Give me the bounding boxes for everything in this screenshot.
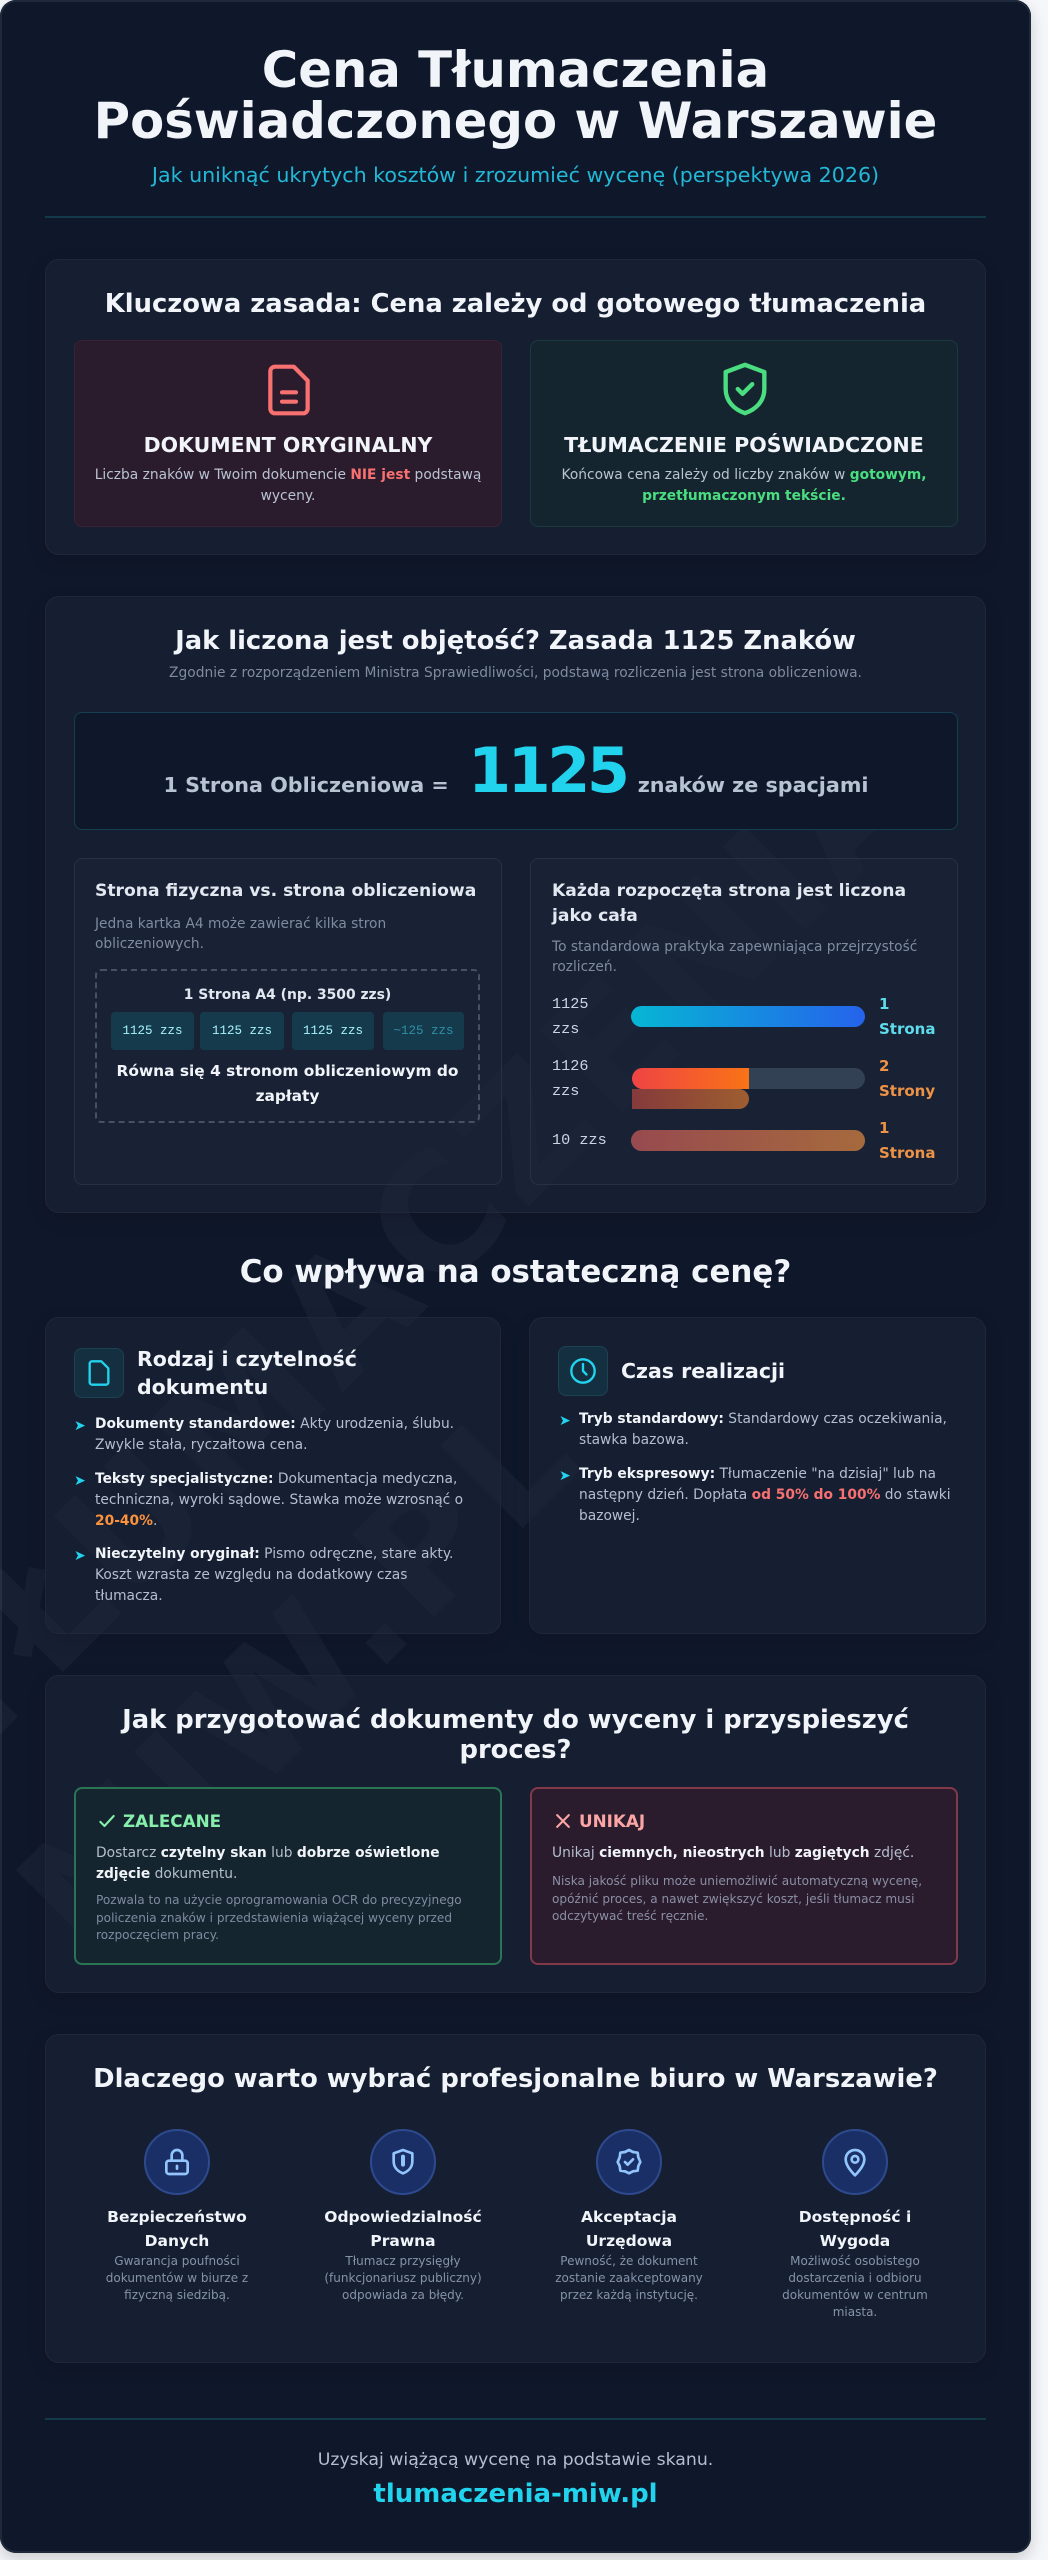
icon: map pin [822,2129,888,2195]
bullet list [74,1416,463,1604]
bar chart [552,995,935,1162]
chip: 1125 zzs [303,1024,363,1038]
result text: Równa się 4 stronom obliczeniowym do [117,1062,458,1080]
feature: data security [106,2208,248,2302]
diagram label: 1 Strona A4 (np. 3500 zzs) [184,987,391,1003]
bullet text: 20-40%. [95,1513,157,1529]
feature: official acceptance: Pewność, że dokument [560,2254,698,2268]
card text: Unikaj ciemnych, nieostrych lub zagiętych zdjęć. [552,1845,914,1861]
card title: DOKUMENT ORYGINALNY [144,433,432,457]
value label: Strona [879,1020,935,1038]
card note: rozpoczęciem pracy. [96,1928,219,1942]
row label: zzs [552,1020,579,1038]
bullet text: techniczna, wyroki sądowe. Stawka może wzrosnąć o [95,1492,463,1508]
page split diagram [95,969,480,1123]
bar: 1126 [632,1068,865,1089]
icon: badge check [596,2129,662,2195]
feature: data security: dokumentów w biurze z [106,2271,248,2285]
footer link: tlumaczenia-miw.pl [373,2479,658,2509]
card note: Pozwala to na użycie oprogramowania OCR do precyzyjnego [96,1893,462,1907]
feature: availability: dokumentów w centrum [782,2288,928,2302]
result text: zapłaty [256,1087,319,1105]
bullet text: Dokumenty standardowe: Akty urodzenia, ślubu. [95,1416,454,1432]
icon: file [74,1348,124,1398]
bullet text [95,1416,454,1453]
card text [96,1845,440,1882]
chip [111,1012,194,1050]
bullet text: następny dzień. Dopłata od 50% do 100% do stawki [579,1487,951,1503]
card description: rozliczeń. [552,959,617,975]
value label: Strony [879,1082,935,1100]
feature: official acceptance: zostanie zaakceptowany [555,2271,703,2285]
chip: 1125 zzs [212,1024,272,1038]
feature: availability: miasta. [833,2305,877,2319]
row label: zzs [552,1082,579,1100]
bullet text [95,1546,453,1604]
formula box: 1 Strona Obliczeniowa = 1125 znaków ze spacjami [164,734,868,807]
bullet text: Tryb standardowy: Standardowy czas oczekiwania, [579,1411,947,1427]
bullet text: Koszt wzrasta ze względu na dodatkowy czas [95,1567,407,1583]
row label: 1126 [552,1057,588,1075]
value label: Strona [879,1144,935,1162]
card text: wyceny. [261,488,315,504]
panel: key rule [45,259,986,555]
feature: official acceptance: przez każdą instytucję. [560,2288,698,2302]
feature: official acceptance: Akceptacja [581,2208,677,2226]
formula box [74,712,958,830]
bullet: ➤ [74,1418,86,1434]
panel title: dokumentu [137,1375,268,1399]
card note: opóźnić proces, a nawet zwiększyć koszt, jeśli tłumacz musi [552,1892,914,1906]
bullet text [579,1411,947,1448]
value label [879,1119,935,1162]
bar: 10 [631,1130,865,1151]
card description: Jedna kartka A4 może zawierać kilka stron [95,916,386,932]
card note: policzenia znaków i przedstawienia wiążącej wyceny przed [96,1910,452,1924]
card text: zdjęcie dokumentu. [96,1866,237,1882]
bullet: ➤ [74,1548,86,1564]
chip [200,1012,284,1050]
panel: volume calculation [45,596,986,1213]
bullet: ➤ [559,1468,571,1484]
row label [552,1057,588,1100]
value label [879,1057,935,1100]
bullet text: Zwykle stała, ryczałtowa cena. [95,1437,307,1453]
bullet text [579,1466,951,1524]
chip [383,1012,464,1050]
card note [96,1893,462,1942]
value label [879,995,935,1038]
subtitle: Jak uniknąć ukrytych kosztów i zrozumieć wycenę (perspektywa 2026) [152,163,879,187]
card text: Dostarcz czytelny skan lub dobrze oświetlone [96,1845,440,1861]
panel title [137,1347,357,1399]
card: every started page [530,858,958,1185]
bar: 1125 [631,1006,865,1027]
icon: clock [558,1346,608,1396]
card text [95,467,481,504]
feature: availability: Dostępność i [799,2208,911,2226]
card: avoid [530,1787,958,1965]
feature: availability: dostarczenia i odbioru [788,2271,922,2285]
feature: availability: Możliwość osobistego [790,2254,920,2268]
card description [552,939,917,975]
card title: TŁUMACZENIE POŚWIADCZONE [564,433,924,457]
bullet list [559,1411,951,1524]
row label [552,995,588,1038]
feature: legal liability [324,2208,482,2302]
card title: ZALECANE [123,1811,221,1831]
chip: 1125 zzs [122,1024,182,1038]
subheading: Zgodnie z rozporządzeniem Ministra Sprawiedliwości, podstawą rozliczenia jest strona obliczeniowa. [169,665,862,681]
bullet text: bazowej. [579,1508,640,1524]
panel title: Czas realizacji [621,1359,785,1383]
feature: legal liability: Prawna [370,2232,436,2250]
card note [552,1874,922,1923]
chip: ~125 zzs [393,1024,454,1038]
title [94,41,937,150]
card description: To standardowa praktyka zapewniająca przejrzystość [552,939,917,955]
heading: proces? [459,1735,572,1765]
card heading: Strona fizyczna vs. strona obliczeniowa [95,881,476,901]
card description: obliczeniowych. [95,936,204,952]
card heading: jako cała [552,906,638,926]
card: certified translation [530,340,958,527]
panel: preparing documents [45,1675,986,1993]
card note: odczytywać treść ręcznie. [552,1909,708,1923]
card text [561,467,927,504]
feature: official acceptance [555,2208,703,2302]
row label: 1125 [552,995,588,1013]
bullet text: tłumacza. [95,1588,163,1604]
feature: availability: Wygoda [820,2232,890,2250]
feature: official acceptance: Urzędowa [586,2232,672,2250]
footer text: Uzyskaj wiążącą wycenę na podstawie skanu. [318,2450,713,2470]
watermark: MIW.PL [0,1355,617,1990]
card: recommended [74,1787,502,1965]
icon: check [99,1814,115,1828]
card: original document [74,340,502,527]
feature: data security: Bezpieczeństwo [107,2208,247,2226]
bullet text: Tryb ekspresowy: Tłumaczenie "na dzisiaj" lub na [579,1466,936,1482]
heading: Dlaczego warto wybrać profesjonalne biuro w Warszawie? [93,2064,938,2094]
result text [117,1062,458,1105]
heading [120,1705,909,1765]
heading: Kluczowa zasada: Cena zależy od gotowego tłumaczenia [105,289,926,319]
icon: cross [556,1814,570,1828]
card text: Liczba znaków w Twoim dokumencie NIE jest podstawą [95,467,481,483]
feature: data security: fizyczną siedzibą. [124,2288,230,2302]
feature: data security: Gwarancja poufności [114,2254,240,2268]
card note: Niska jakość pliku może uniemożliwić automatyczną wycenę, [552,1874,922,1888]
heading: final price: Co wpływa na ostateczną cenę? [240,1254,791,1290]
chip [292,1012,374,1050]
title: Cena Tłumaczenia [262,41,769,99]
bullet: ➤ [74,1473,86,1489]
value label: 1 [879,1119,889,1137]
card description [94,916,386,952]
feature: legal liability: odpowiada za błędy. [342,2288,464,2302]
heading: Jak liczona jest objętość? Zasada 1125 Znaków [175,626,856,656]
feature: availability [782,2208,928,2319]
icon: document [268,364,310,416]
card heading [551,881,906,926]
card: physical vs calculated page [74,858,502,1185]
icon: shield [370,2129,436,2195]
value label: 2 [879,1057,889,1075]
card text: przetłumaczonym tekście. [642,488,846,504]
feature: legal liability: Odpowiedzialność [324,2208,482,2226]
bullet text: Nieczytelny oryginał: Pismo odręczne, stare akty. [95,1546,453,1562]
card heading: Każda rozpoczęta strona jest liczona [552,881,906,901]
bullet text: stawka bazowa. [579,1432,689,1448]
icon: lock [144,2129,210,2195]
row label: 10 zzs [552,1131,607,1149]
bullet text [95,1471,463,1529]
panel: document type [45,1317,501,1634]
feature: data security: Danych [145,2232,209,2250]
heading: Jak przygotować dokumenty do wyceny i przyspieszyć [122,1705,909,1735]
panel title: Rodzaj i czytelność [137,1347,357,1371]
bullet text: Teksty specjalistyczne: Dokumentacja medyczna, [95,1471,457,1487]
card text: Końcowa cena zależy od liczby znaków w gotowym, [561,467,927,483]
panel: why choose [45,2034,986,2363]
value label: 1 [879,995,889,1013]
title: Poświadczonego w Warszawie [94,92,937,150]
bullet: ➤ [559,1413,571,1429]
bar: overflow [632,1089,749,1109]
panel: turnaround [529,1317,986,1634]
feature: legal liability: (funkcjonariusz publiczny) [324,2271,482,2285]
icon: shield check [724,362,766,416]
card title: UNIKAJ [579,1811,645,1831]
feature: legal liability: Tłumacz przysięgły [345,2254,461,2268]
